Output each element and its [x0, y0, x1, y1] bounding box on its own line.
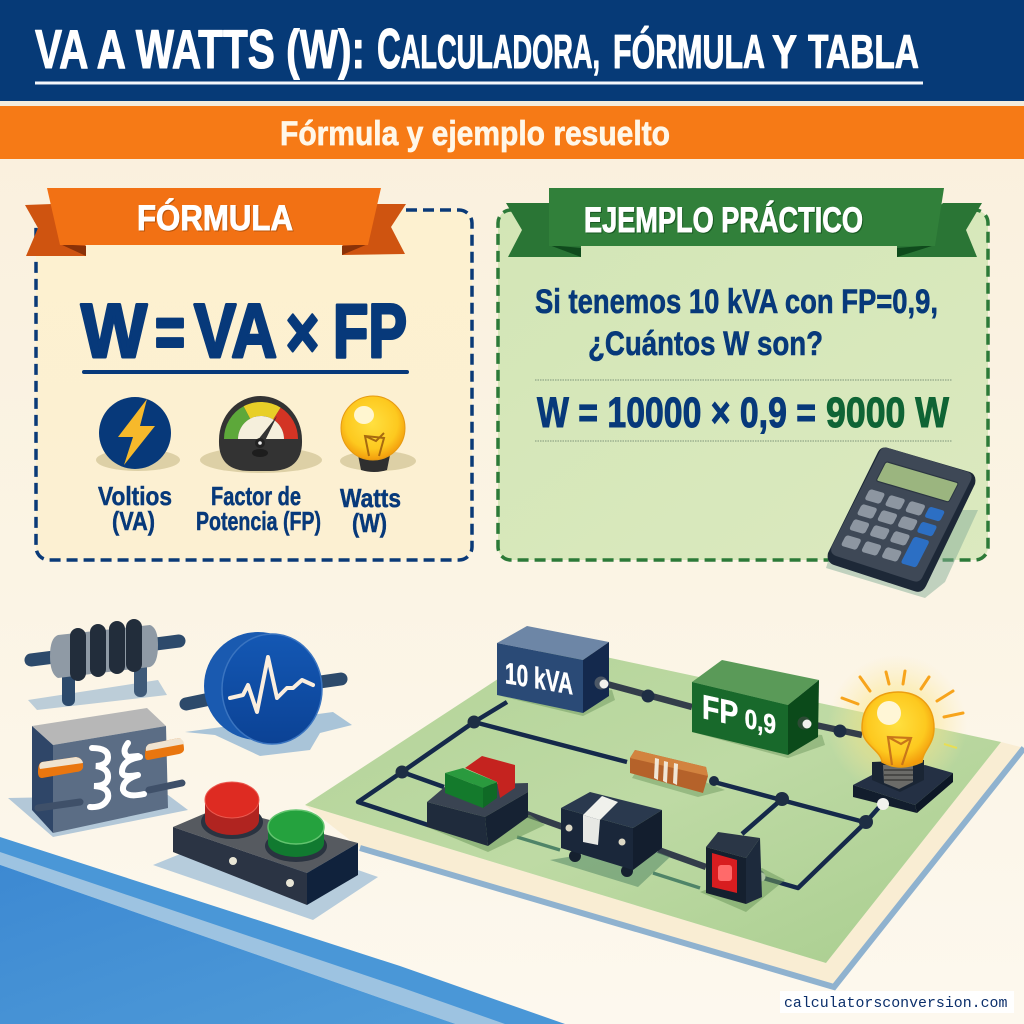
ribbon: fórmula: FÓRMULA	[137, 198, 293, 238]
label: factor de potencia: Factor de	[211, 481, 301, 511]
formula: W = VA × FP	[81, 289, 407, 374]
component: FP 0,9 block	[692, 660, 825, 758]
question text: Si tenemos 10 kVA con FP=0,9,	[535, 283, 938, 321]
component: green and red switch	[427, 756, 545, 852]
paper sheet edge	[305, 742, 1024, 987]
ribbon: ejemplo práctico: EJEMPLO PRÁCTICO	[584, 200, 863, 240]
component: lit bulb	[842, 671, 963, 813]
title: VA A WATTS (W):	[35, 18, 365, 80]
dotted divider	[535, 379, 952, 381]
component: inductor	[28, 619, 179, 710]
subtitle band	[0, 106, 1024, 159]
component: blue AC source	[185, 632, 352, 756]
wire shadows	[517, 837, 700, 888]
formula underline	[82, 370, 409, 374]
title: TABLA	[808, 25, 919, 78]
watermark	[780, 991, 1014, 1013]
circuit board	[305, 626, 1024, 987]
component: motor box	[550, 792, 670, 887]
worked calculation: 9000 W	[826, 389, 949, 437]
label: factor de potencia: Potencia (FP)	[196, 506, 321, 536]
label: voltios: Voltios	[98, 481, 172, 511]
wire nodes	[396, 690, 873, 829]
panel: ejemplo práctico	[498, 188, 988, 598]
ribbon: ejemplo práctico	[506, 188, 982, 257]
wires	[358, 683, 881, 888]
formula: W = VA × FP: W	[81, 289, 147, 374]
icon: gauge	[200, 396, 322, 473]
component: resistor	[630, 750, 725, 797]
formula: W = VA × FP: ×	[286, 293, 319, 373]
title: CALCULADORA,	[377, 17, 600, 81]
title	[35, 17, 919, 81]
component: 10 kVA source	[497, 626, 615, 716]
question text	[535, 283, 938, 363]
header band	[0, 0, 1024, 106]
component: push button box	[153, 782, 378, 920]
title: FÓRMULA	[613, 25, 765, 78]
ribbon: fórmula	[25, 188, 406, 256]
title: Y	[772, 25, 797, 78]
connector pins	[512, 676, 812, 882]
label: factor de potencia	[196, 481, 321, 536]
label: voltios	[98, 481, 172, 536]
blue corner band	[0, 837, 565, 1024]
icon: voltios	[96, 397, 180, 471]
label: voltios: (VA)	[112, 506, 155, 536]
panel background	[498, 210, 988, 560]
panel: fórmula	[25, 188, 472, 560]
component: transformer	[8, 708, 188, 837]
label: watts: Watts	[340, 483, 401, 513]
panel background	[36, 210, 472, 560]
green board	[305, 645, 1001, 963]
label: watts	[340, 483, 401, 538]
component: red rocker switch	[700, 832, 785, 912]
glow	[827, 655, 967, 795]
component: 10 kVA source: 10 kVA	[505, 657, 573, 702]
component: FP 0,9 block: FP 0,9	[702, 688, 776, 742]
subtitle band: Fórmula y ejemplo resuelto	[280, 115, 670, 153]
formula: W = VA × FP: VA	[194, 289, 277, 374]
icon: calculator	[826, 447, 978, 598]
dotted divider	[535, 440, 952, 442]
worked calculation: W = 10000 × 0,9 =	[537, 389, 816, 437]
question text: ¿Cuántos W son?	[588, 325, 823, 363]
icon: bulb	[340, 396, 416, 472]
label: watts: (W)	[352, 508, 387, 538]
watermark: calculatorsconversion.com	[784, 996, 1007, 1012]
formula: W = VA × FP: =	[155, 293, 185, 373]
formula: W = VA × FP: FP	[333, 289, 407, 374]
